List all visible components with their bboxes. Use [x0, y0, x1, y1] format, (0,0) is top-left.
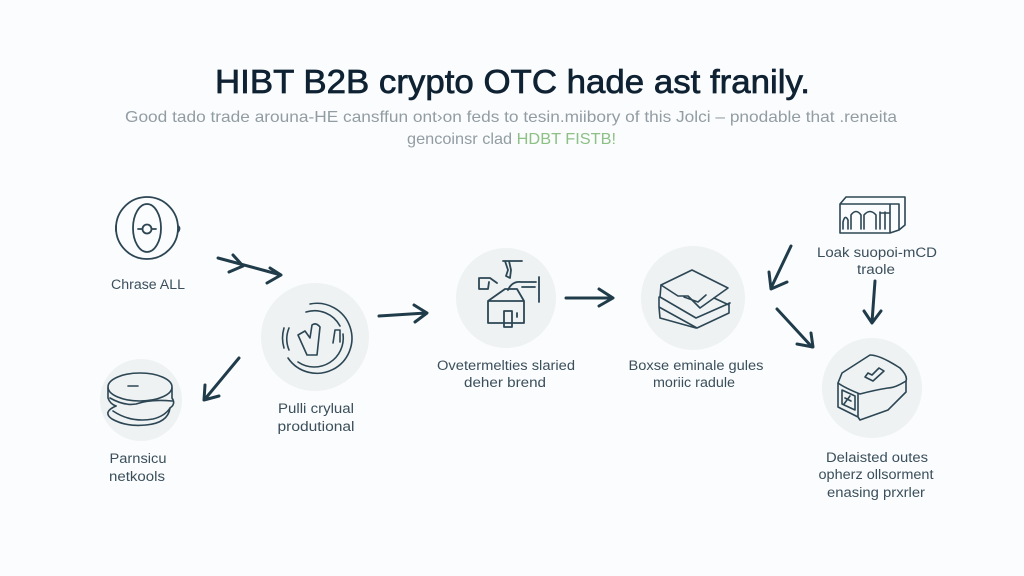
icon: coin ring [116, 197, 180, 259]
icon: building [456, 248, 556, 348]
icon: chart box [840, 197, 905, 233]
label [278, 401, 354, 434]
label: Boxse eminale gules [628, 358, 764, 373]
label: traole [857, 262, 895, 277]
step: Boxse eminale [628, 246, 764, 390]
label: Pulli crylual [278, 401, 354, 416]
label [817, 245, 937, 277]
step: Chrase ALL [111, 197, 186, 292]
subtitle: Good tado trade arouna-HE cansffun ont›on feds to tesin.miibory of this Jolci – pnodable that .reneita [125, 109, 897, 126]
arrow: to step 4 from top [769, 246, 791, 289]
icon: box with check [822, 338, 922, 438]
subtitle [125, 109, 897, 148]
label: Loak suopoi-mCD [817, 245, 937, 260]
label: moriic radule [653, 375, 735, 390]
label: deher brend [464, 375, 546, 390]
label [818, 450, 934, 500]
label: enasing prxrler [827, 485, 926, 500]
step: Delaisted outes [818, 338, 934, 500]
icon: layers [641, 246, 745, 350]
step: Overtermelties [437, 248, 575, 390]
label: Parnsicu [110, 451, 166, 466]
label [109, 451, 166, 484]
step: Pulli crylual [261, 283, 369, 434]
arrow: to step 4 [566, 289, 613, 306]
icon: shield circle [261, 283, 369, 391]
label: Delaisted outes [826, 450, 928, 465]
step: Parnsicu netkools [100, 359, 182, 484]
label [437, 358, 575, 390]
arrow: diagonal to step 5 [777, 309, 813, 347]
label: Ovetermelties slaried [437, 358, 575, 373]
title: HIBT B2B crypto OTC hade ast franily. [215, 63, 810, 100]
label: produtional [278, 419, 354, 434]
arrow: down to step 5 [864, 281, 881, 323]
arrow: to stack [204, 358, 239, 400]
arrow: to step 2 [218, 255, 281, 283]
arrow: to step 3 [379, 305, 427, 322]
icon: coin stack [100, 359, 182, 441]
label: opherz ollsorment [818, 467, 934, 482]
label: Chrase ALL [111, 277, 186, 292]
step: Loak suopoi-mCD [817, 197, 937, 277]
label [628, 358, 764, 390]
label: netkools [109, 469, 165, 484]
subtitle: gencoinsr clad HDBT FISTB! [407, 131, 616, 148]
